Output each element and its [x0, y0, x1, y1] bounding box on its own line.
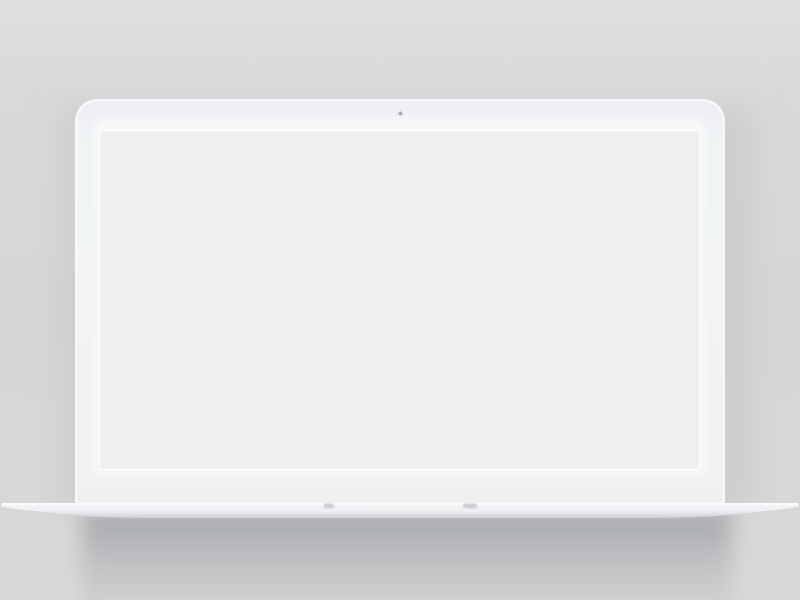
screen — [100, 130, 700, 470]
hinge notch right — [463, 504, 477, 508]
lid drop shadow on wall — [60, 106, 755, 506]
hinge notch left — [324, 504, 334, 508]
shadow under laptop base — [82, 512, 732, 600]
laptop base — [1, 503, 799, 518]
webcam — [399, 112, 402, 115]
inner bezel glow — [94, 118, 706, 476]
front lip — [332, 508, 468, 510]
laptop lid — [75, 99, 725, 504]
